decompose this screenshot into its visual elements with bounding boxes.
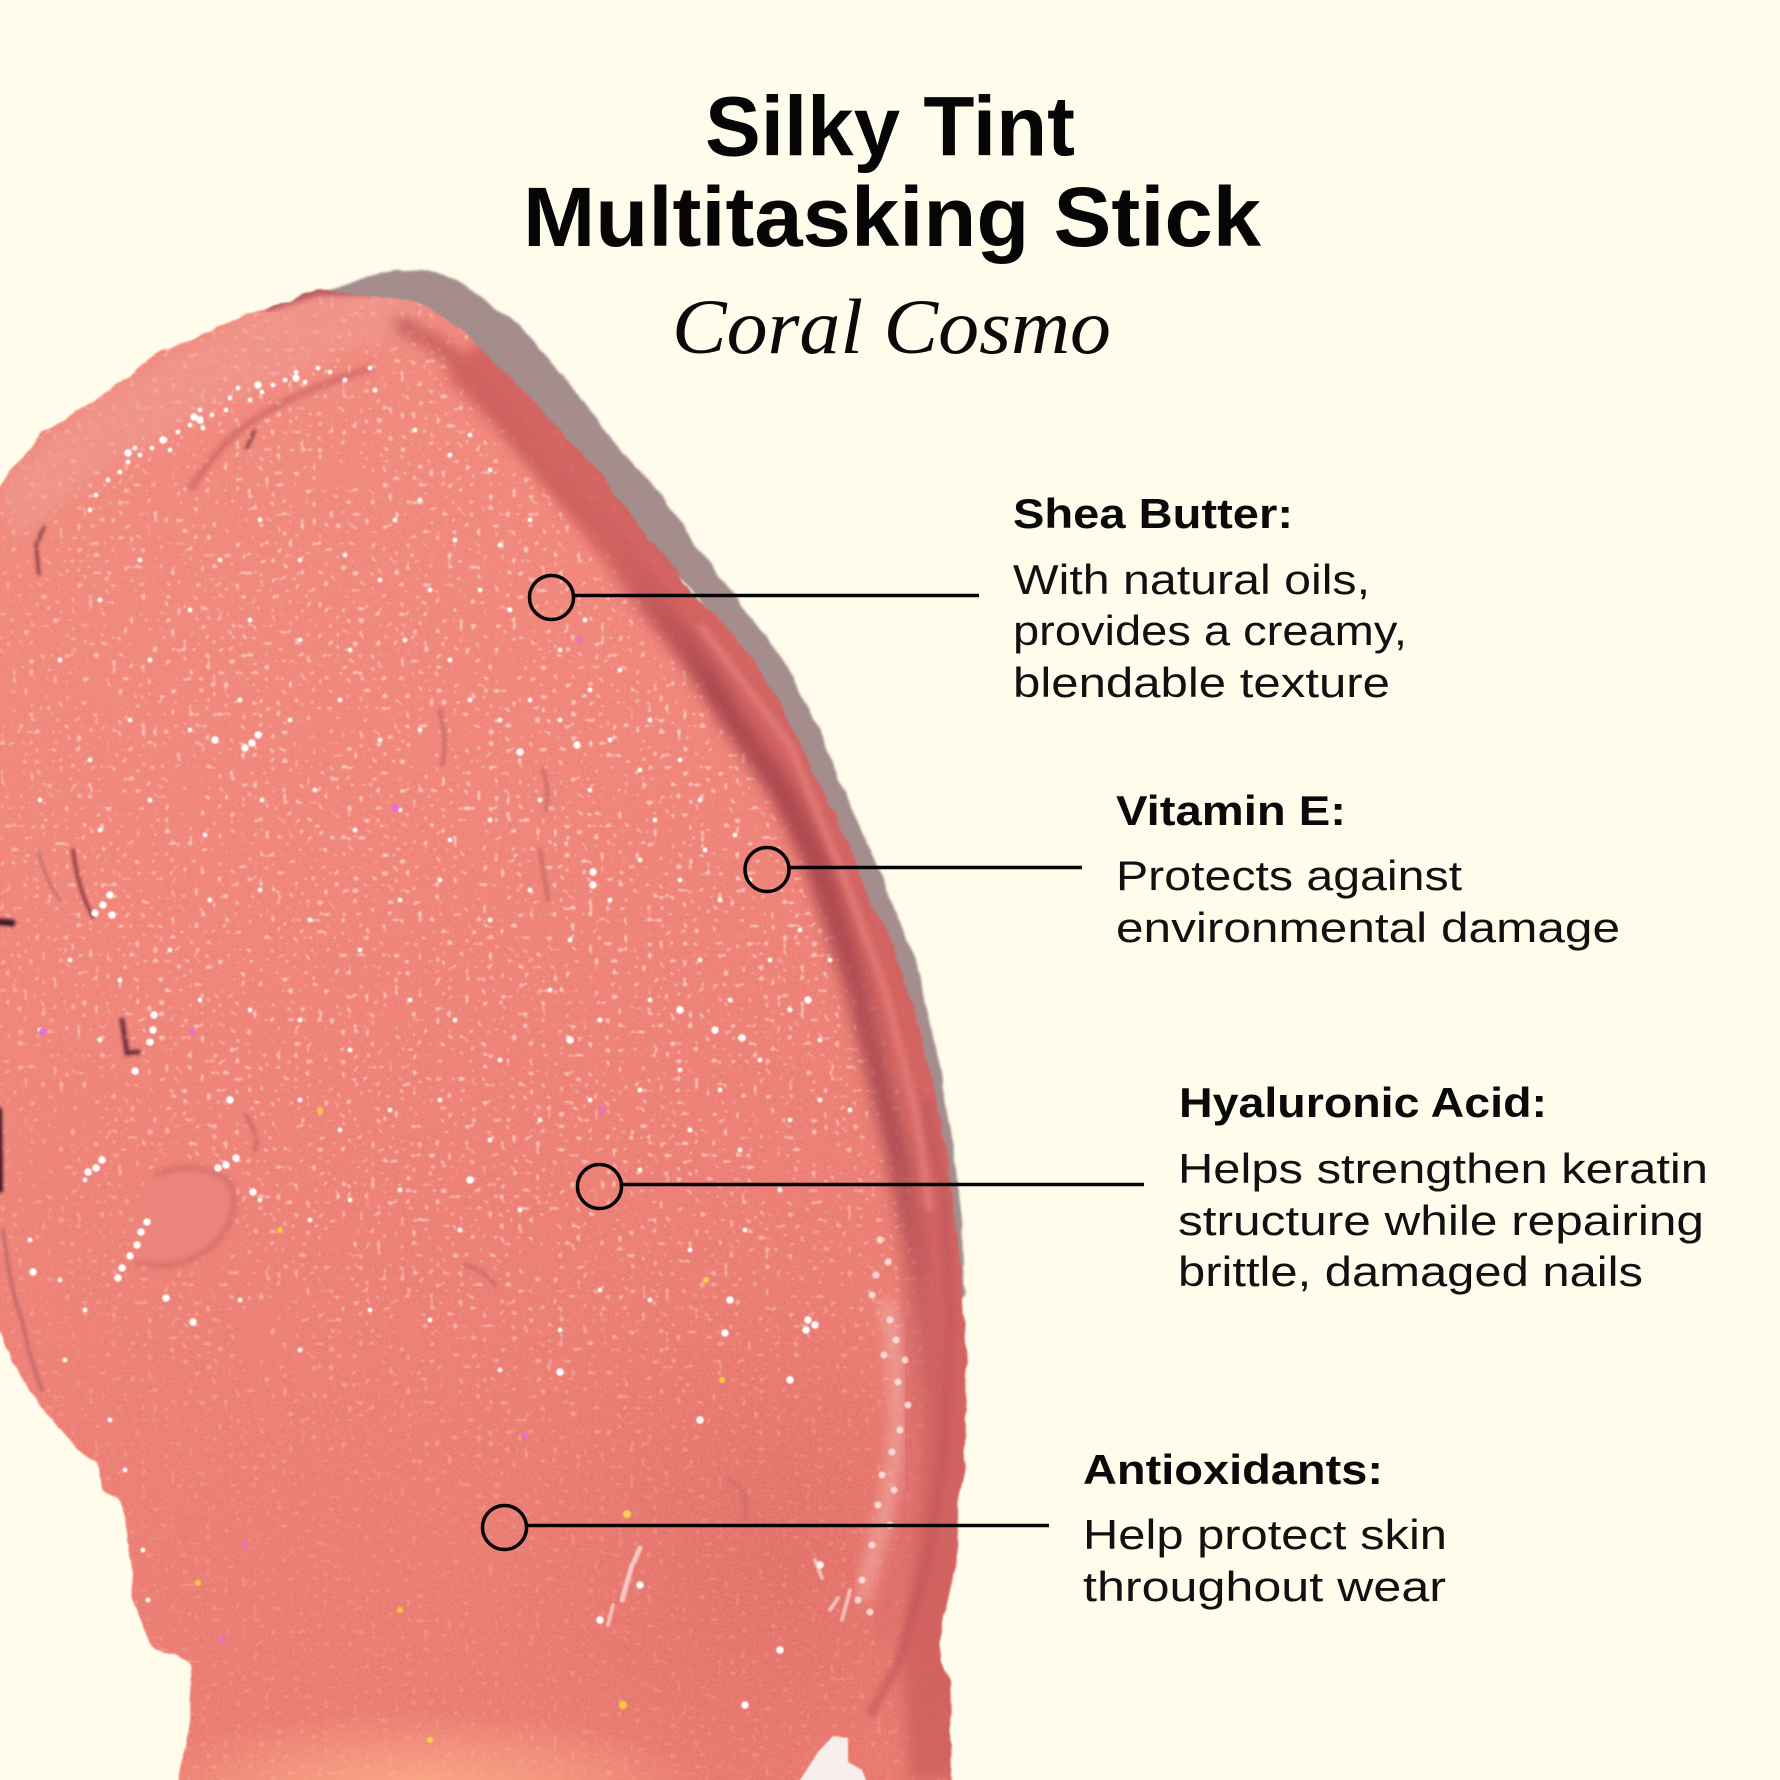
title line 1: Silky Tint [705, 80, 1075, 174]
pale glitter band on right [862, 1300, 898, 1600]
crease under top [190, 368, 372, 490]
heading: shea butter: Shea Butter: [1013, 490, 1293, 537]
yellow and pink flecks [39, 637, 725, 1743]
marker and leader [745, 848, 1082, 892]
description: brittle, damaged nails [1178, 1248, 1643, 1295]
callout: hyaluronic acid [578, 1079, 1708, 1295]
description [1178, 1145, 1708, 1295]
callout: shea butter [530, 490, 1407, 706]
description [1083, 1511, 1447, 1610]
creases [0, 710, 746, 1520]
title [523, 80, 1261, 264]
top rim lighter [8, 296, 420, 528]
swatch shadow [300, 270, 965, 1300]
blob ring [133, 1168, 234, 1265]
description: provides a creamy, [1013, 607, 1407, 654]
swatch body [0, 288, 969, 1780]
dark band [620, 565, 925, 1480]
description: With natural oils, [1013, 556, 1370, 603]
title line 2: Multitasking Stick [523, 170, 1261, 264]
rim highlight stripes [700, 625, 930, 1210]
description: Helps strengthen keratin [1178, 1145, 1708, 1192]
subtitle: Coral Cosmo [672, 283, 1111, 370]
heading: antioxidants: Antioxidants: [1083, 1446, 1383, 1493]
rim outer [470, 350, 962, 1780]
description: structure while repairing [1178, 1197, 1704, 1244]
heading: vitamin e: Vitamin E: [1116, 787, 1346, 834]
description: blendable texture [1013, 659, 1390, 706]
marker and leader [482, 1506, 1049, 1550]
grain texture [0, 302, 926, 1780]
sparkles texture [0, 296, 940, 1780]
white sparkle dots [30, 368, 908, 1705]
description: throughout wear [1083, 1563, 1446, 1610]
description: Help protect skin [1083, 1511, 1447, 1558]
description [1013, 556, 1407, 706]
callout: vitamin e [745, 787, 1620, 951]
marker and leader [530, 576, 979, 620]
callout: antioxidants [482, 1446, 1447, 1610]
description: environmental damage [1116, 904, 1620, 951]
description: Protects against [1116, 852, 1462, 899]
marker and leader [578, 1164, 1144, 1208]
heading: hyaluronic acid: Hyaluronic Acid: [1179, 1079, 1547, 1126]
lipstick swatch [0, 268, 969, 1780]
top dark edge [265, 290, 372, 308]
white notch at bottom [797, 1736, 868, 1780]
description [1116, 852, 1620, 951]
